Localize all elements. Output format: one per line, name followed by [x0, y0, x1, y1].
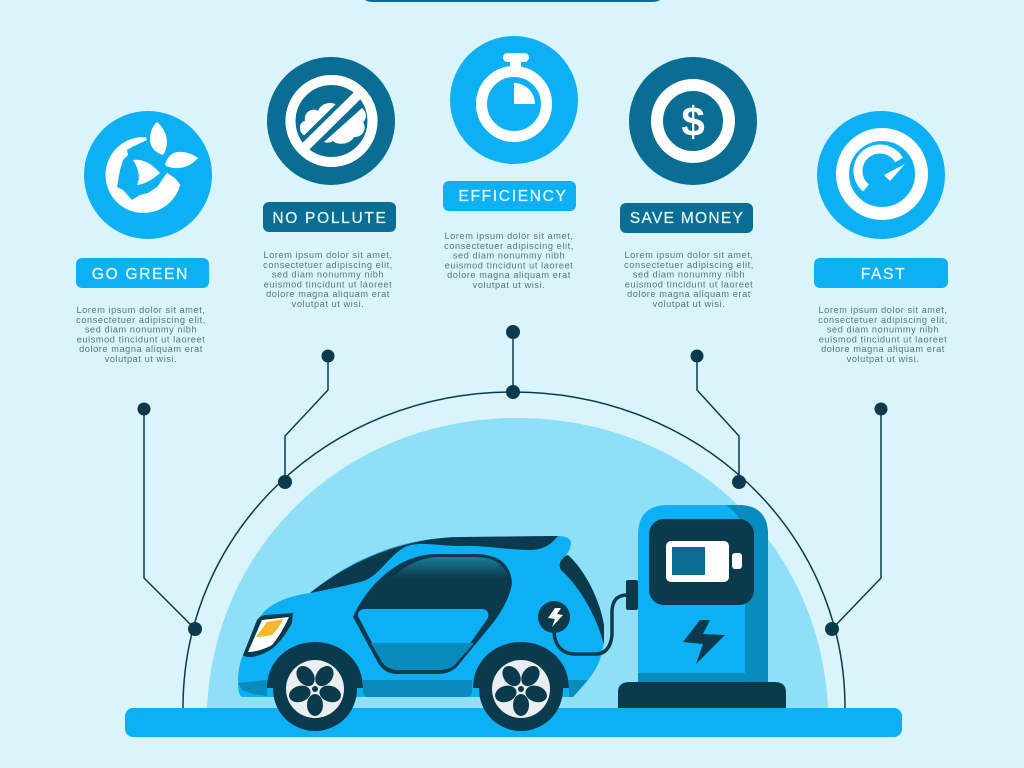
text block: fast: Lorem ipsum dolor sit amet,	[818, 305, 948, 315]
icon: dollar coin	[629, 57, 757, 185]
text block: go green: euismod tincidunt ut laoreet	[77, 334, 205, 344]
car	[238, 536, 627, 731]
text block: go green: consectetuer adipiscing elit,	[76, 315, 206, 325]
text block: no pollute: sed diam nonummy nibh	[272, 270, 384, 280]
panel: efficiency	[443, 36, 578, 290]
label: no pollute	[263, 202, 396, 232]
text block: no pollute: euismod tincidunt ut laoreet	[264, 279, 392, 289]
panel: fast	[814, 111, 948, 364]
top title bar fragment	[365, 0, 660, 2]
text block: efficiency: consectetuer adipiscing elit,	[444, 241, 574, 251]
lightning bolt	[683, 620, 725, 664]
roof strip	[310, 536, 558, 593]
label: fast: FAST	[861, 266, 906, 283]
icon: leafy globe	[84, 111, 212, 239]
label: go green: GO GREEN	[92, 266, 189, 283]
arc line	[183, 392, 845, 708]
label: efficiency: EFFICIENCY	[458, 188, 568, 205]
text block: save money: sed diam nonummy nibh	[633, 270, 745, 280]
icon: crossed-out clouds	[267, 57, 395, 185]
text block: no pollute: volutpat ut wisi.	[292, 299, 364, 309]
station screen	[649, 519, 754, 605]
plug	[626, 580, 638, 610]
text block: fast: dolore magna aliquam erat	[821, 344, 945, 354]
connectors with dots	[138, 325, 888, 636]
text block: fast: euismod tincidunt ut laoreet	[819, 334, 947, 344]
text block: save money: volutpat ut wisi.	[653, 299, 725, 309]
text block: go green: Lorem ipsum dolor sit amet,	[76, 305, 206, 315]
icon: stopwatch	[450, 36, 578, 164]
battery icon	[666, 541, 742, 582]
text block: efficiency: sed diam nonummy nibh	[453, 251, 565, 261]
text block: efficiency: dolore magna aliquam erat	[447, 270, 571, 280]
label: save money	[620, 203, 753, 233]
charging cable	[554, 595, 627, 654]
headlight	[243, 613, 293, 657]
text block: fast: sed diam nonummy nibh	[827, 325, 939, 335]
text block: save money: dolore magna aliquam erat	[627, 289, 751, 299]
text block: fast: consectetuer adipiscing elit,	[818, 315, 948, 325]
text block: efficiency: Lorem ipsum dolor sit amet,	[444, 231, 574, 241]
car body	[238, 536, 604, 697]
text block: save money: Lorem ipsum dolor sit amet,	[624, 250, 754, 260]
text block: go green: dolore magna aliquam erat	[79, 344, 203, 354]
text block: go green: sed diam nonummy nibh	[85, 325, 197, 335]
panel: no pollute	[263, 57, 396, 309]
icon: speedometer	[817, 111, 945, 239]
rear window strip	[560, 555, 604, 645]
station body	[638, 505, 768, 682]
panel: go green	[76, 111, 212, 364]
label: go green	[76, 258, 209, 288]
panel: save money	[620, 57, 757, 309]
text block: go green: volutpat ut wisi.	[105, 354, 177, 364]
side window and door	[353, 554, 512, 674]
text block: no pollute: dolore magna aliquam erat	[266, 289, 390, 299]
rear wheel	[473, 642, 569, 731]
text block: fast: volutpat ut wisi.	[847, 354, 919, 364]
charging station	[618, 505, 786, 708]
front wheel	[267, 642, 363, 731]
text block: efficiency: volutpat ut wisi.	[473, 280, 545, 290]
charge port	[538, 601, 570, 633]
label: save money: SAVE MONEY	[630, 210, 744, 227]
label: no pollute: NO POLLUTE	[272, 210, 388, 227]
ground bar	[125, 708, 902, 737]
lower trim	[238, 680, 588, 697]
station base	[618, 682, 786, 708]
text block: no pollute: consectetuer adipiscing elit,	[263, 260, 393, 270]
dome background	[207, 418, 828, 708]
label: fast	[814, 258, 948, 288]
label: efficiency	[443, 181, 576, 211]
text block: no pollute: Lorem ipsum dolor sit amet,	[263, 250, 393, 260]
text block: efficiency: euismod tincidunt ut laoreet	[445, 260, 573, 270]
text block: save money: consectetuer adipiscing elit,	[624, 260, 754, 270]
icon: dollar coin: $	[681, 98, 705, 145]
text block: save money: euismod tincidunt ut laoreet	[625, 279, 753, 289]
